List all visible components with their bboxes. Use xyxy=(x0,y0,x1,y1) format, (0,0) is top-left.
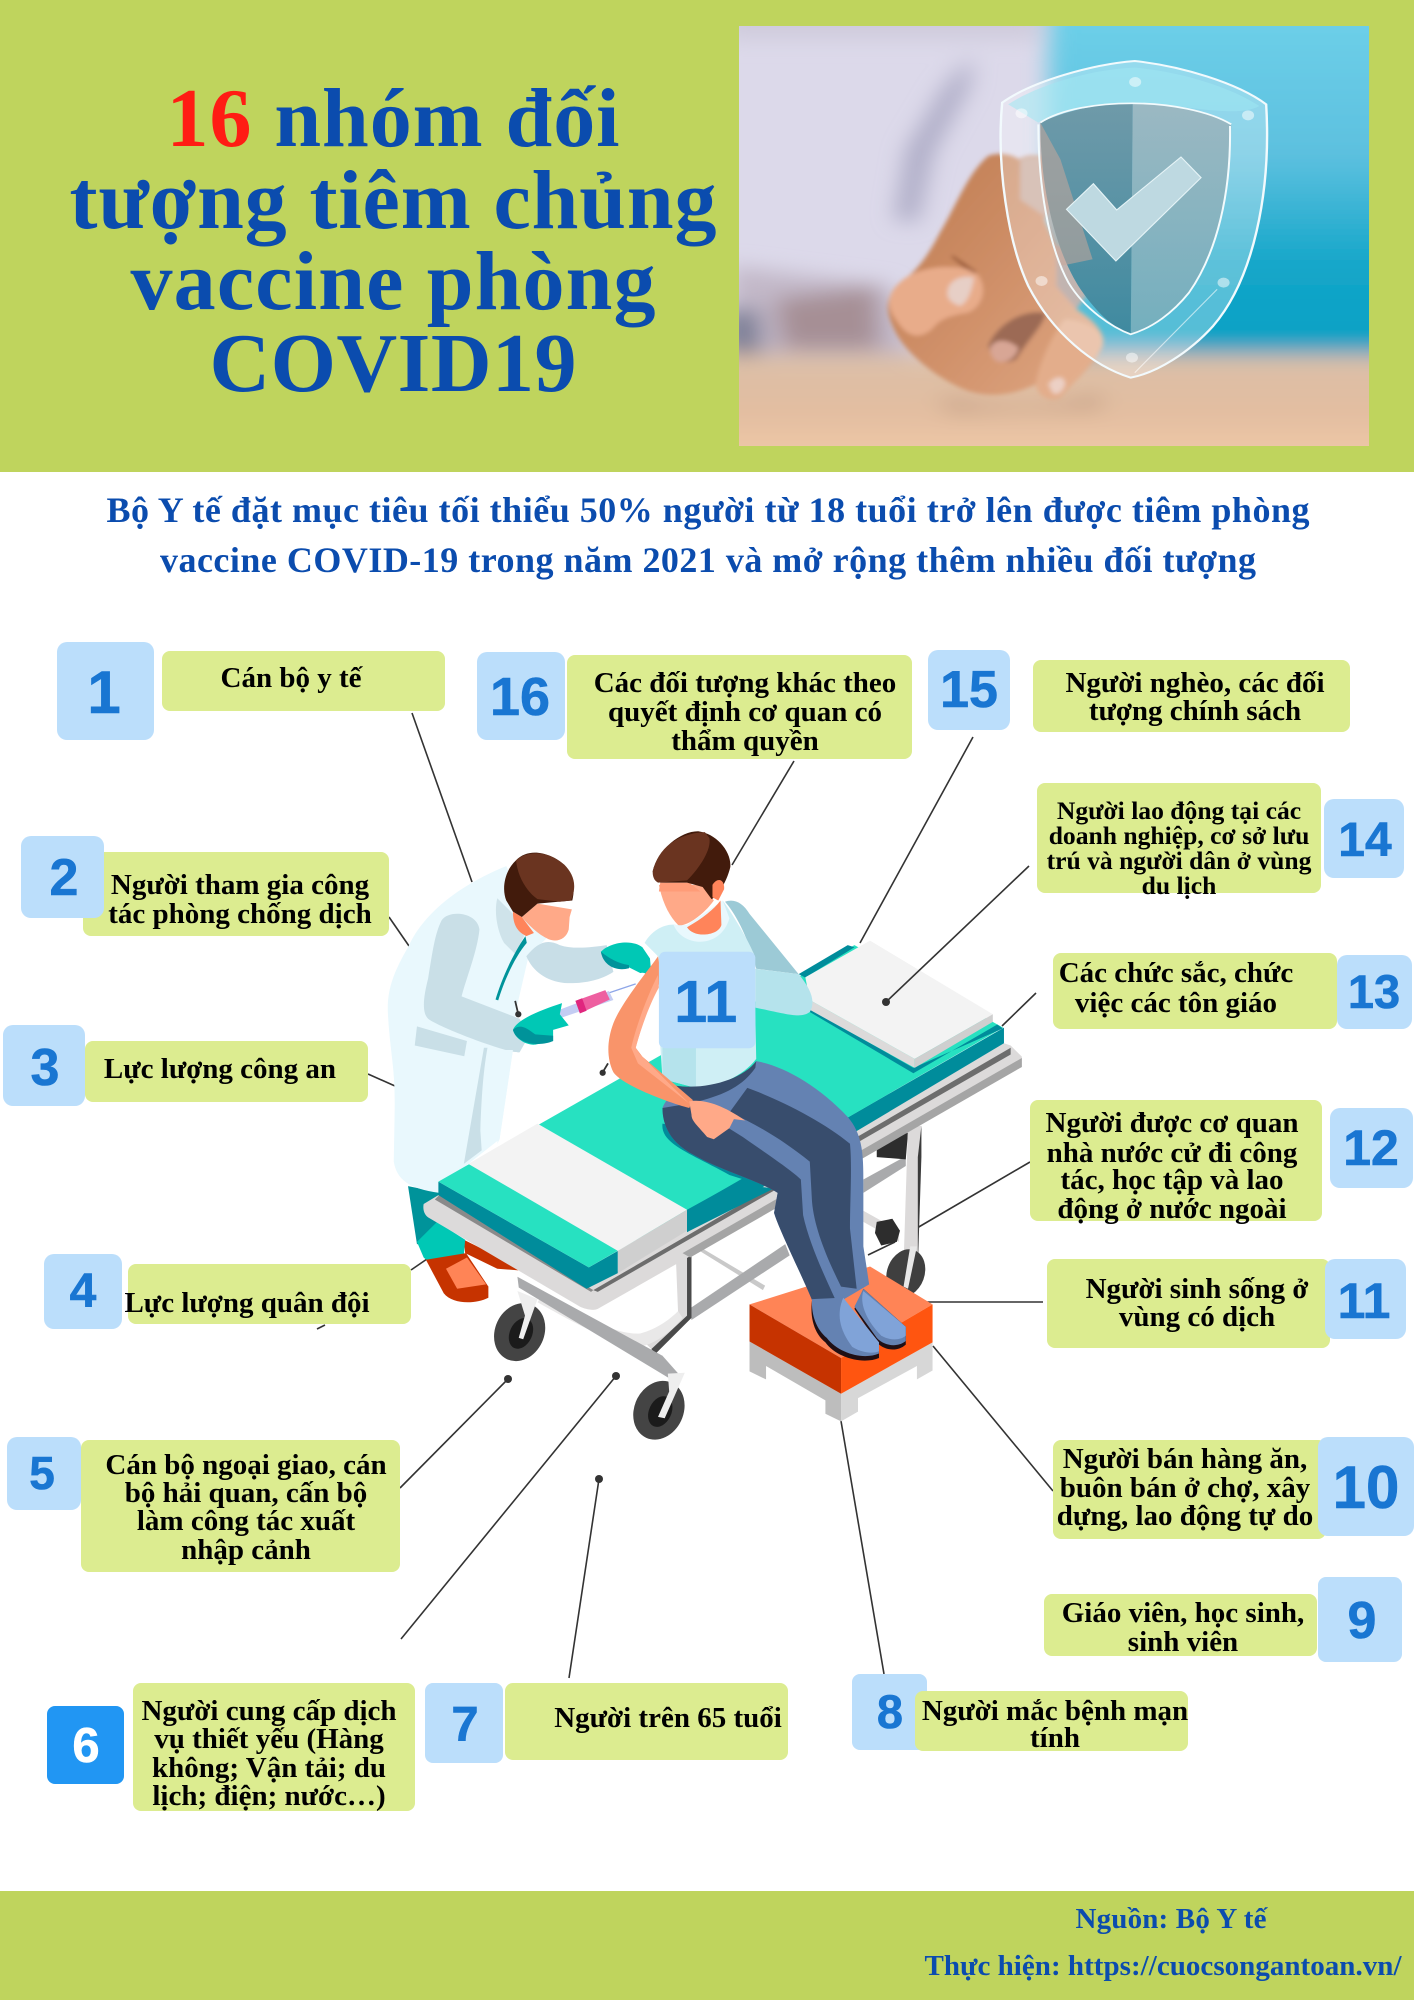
wheels xyxy=(485,1291,694,1448)
item 16 label: quyết định cơ quan có xyxy=(608,696,882,728)
item 3 label xyxy=(85,1041,368,1102)
item 16 label: Các đối tượng khác theo xyxy=(594,667,896,699)
item 5 badge: 5 xyxy=(29,1447,55,1499)
item 15 label: tượng chính sách xyxy=(1089,695,1301,727)
item 5 label: Cán bộ ngoại giao, cán xyxy=(105,1449,387,1481)
item 6 badge xyxy=(47,1706,124,1784)
title xyxy=(70,72,716,410)
footer text: source and credit: Nguồn: Bộ Y tế xyxy=(1076,1903,1269,1935)
item 13 badge: 13 xyxy=(1348,965,1400,1018)
item 9 badge: 9 xyxy=(1348,1592,1376,1650)
mattress xyxy=(438,941,1004,1289)
item 2 label xyxy=(83,852,389,936)
item 1 badge xyxy=(57,642,154,740)
item 13 label xyxy=(1053,953,1337,1029)
photo: hand touching glass shield with check mark xyxy=(739,26,1369,446)
item 1 badge: 1 xyxy=(87,659,121,726)
item 6 label: vụ thiết yếu (Hàng xyxy=(154,1723,384,1755)
item 12 label xyxy=(1030,1100,1322,1225)
item 12 label: tác, học tập và lao xyxy=(1060,1164,1284,1196)
item 12 label: Người được cơ quan xyxy=(1046,1107,1298,1139)
item 6 label: không; Vận tải; du xyxy=(152,1752,386,1784)
gurney undercarriage xyxy=(517,1126,932,1379)
illustration: doctor vaccinating a patient on a hospital bed xyxy=(388,831,1022,1448)
item 8 badge xyxy=(852,1674,927,1750)
subtitle: vaccine COVID-19 trong năm 2021 và mở rộng thêm nhiều đối tượng xyxy=(160,540,1256,580)
item 5 label: làm công tác xuất xyxy=(137,1505,355,1537)
item 10 label: Người bán hàng ăn, xyxy=(1063,1443,1307,1475)
item 4 label xyxy=(124,1264,411,1324)
item 14 label: du lịch xyxy=(1142,871,1216,900)
gloves xyxy=(513,942,651,1045)
item 3 badge: 3 xyxy=(31,1039,59,1097)
step stool xyxy=(750,1266,933,1421)
item 9 label: sinh viên xyxy=(1128,1626,1238,1658)
item 9 label: Giáo viên, học sinh, xyxy=(1062,1597,1304,1629)
doctor stethoscope dot xyxy=(515,1001,518,1014)
leader line 14 over bed pad xyxy=(886,866,1029,1002)
item 11 badge: 11 xyxy=(1338,1273,1390,1329)
header band xyxy=(0,0,1414,472)
item 15 badge xyxy=(928,650,1010,730)
item 16 badge xyxy=(477,652,565,740)
item 12 badge xyxy=(1330,1108,1413,1188)
item 13 badge xyxy=(1337,955,1412,1029)
item 11 label: vùng có dịch xyxy=(1119,1301,1275,1333)
item 12 label: nhà nước cử đi công xyxy=(1047,1137,1298,1169)
leader line end dots xyxy=(504,998,890,1483)
item 5 label: bộ hải quan, cấn bộ xyxy=(125,1477,367,1509)
badge: 11 on patient: 11 xyxy=(674,968,737,1035)
item 8 label xyxy=(915,1691,1188,1754)
syringe xyxy=(550,984,636,1021)
item 4 badge xyxy=(44,1254,122,1329)
item 9 label xyxy=(1044,1594,1317,1658)
item 2 label: tác phòng chống dịch xyxy=(108,898,372,930)
glass shield xyxy=(1001,61,1267,378)
item 15 badge: 15 xyxy=(940,661,998,719)
item 6 label xyxy=(133,1683,415,1812)
item 14 label: trú và người dân ở vùng xyxy=(1047,846,1312,875)
item 2 label: Người tham gia công xyxy=(111,869,370,901)
item 5 label xyxy=(81,1440,400,1572)
item 14 label xyxy=(1037,783,1321,900)
item 3 badge xyxy=(3,1025,85,1106)
hand xyxy=(888,154,1103,399)
item 2 badge: 2 xyxy=(50,849,78,907)
item 3 label: Lực lượng công an xyxy=(104,1053,336,1085)
item 7 badge xyxy=(425,1683,503,1763)
item 10 badge: 10 xyxy=(1333,1454,1399,1521)
item 14 badge xyxy=(1324,799,1404,878)
footer text: source and credit: Thực hiện: https://cuocsongantoan.vn/ xyxy=(924,1950,1402,1982)
item 8 label: tính xyxy=(1030,1722,1080,1754)
item 7 label xyxy=(505,1683,788,1760)
footer band xyxy=(0,1891,1414,2000)
badge: 11 on patient xyxy=(659,952,755,1048)
item 10 label: dựng, lao động tự do xyxy=(1057,1500,1313,1532)
subtitle: Bộ Y tế đặt mục tiêu tối thiểu 50% người từ 18 tuổi trở lên được tiêm phòng xyxy=(106,490,1310,530)
item 12 badge: 12 xyxy=(1343,1120,1399,1176)
title: tượng tiêm chủng xyxy=(70,154,716,247)
footer text: source and credit xyxy=(924,1903,1402,1982)
title: COVID19 xyxy=(210,317,576,410)
item 4 label: Lực lượng quân đội xyxy=(124,1287,370,1319)
item 14 badge: 14 xyxy=(1338,814,1392,867)
item 15 label: Người nghèo, các đối xyxy=(1065,667,1325,699)
item 1 label xyxy=(162,651,445,711)
leader lines xyxy=(317,713,1053,1678)
item 5 badge xyxy=(7,1437,81,1510)
dots on illustration xyxy=(603,1063,608,1072)
item 6 label: lịch; điện; nước…) xyxy=(152,1780,386,1812)
item 10 label: buôn bán ở chợ, xây xyxy=(1060,1472,1311,1504)
item 13 label: Các chức sắc, chức xyxy=(1059,957,1293,989)
patient xyxy=(608,831,906,1361)
item 10 label xyxy=(1053,1440,1326,1539)
item 7 badge: 7 xyxy=(451,1698,479,1752)
doctor coat xyxy=(388,866,613,1193)
item 6 badge: 6 xyxy=(72,1719,100,1773)
title: vaccine phòng xyxy=(130,235,656,328)
item 9 badge xyxy=(1318,1577,1402,1662)
item 15 label xyxy=(1033,660,1350,732)
item 16 label: thẩm quyền xyxy=(671,725,819,757)
item 11 badge xyxy=(1325,1259,1406,1339)
item 13 label: việc các tôn giáo xyxy=(1075,987,1277,1019)
title: 16 nhóm đối xyxy=(166,72,620,165)
item 6 label: Người cung cấp dịch xyxy=(141,1695,397,1727)
item 7 label: Người trên 65 tuổi xyxy=(554,1702,782,1734)
bed frame plate xyxy=(423,1043,1022,1310)
item 5 label: nhập cảnh xyxy=(181,1534,311,1566)
item 10 badge xyxy=(1318,1437,1414,1536)
item 8 badge: 8 xyxy=(877,1685,903,1738)
item 16 badge: 16 xyxy=(490,667,550,727)
item 1 label: Cán bộ y tế xyxy=(221,662,364,694)
item 11 label: Người sinh sống ở xyxy=(1086,1273,1308,1305)
item 11 label xyxy=(1047,1259,1330,1348)
item 16 label xyxy=(567,655,912,759)
item 14 label: Người lao động tại các xyxy=(1057,796,1301,825)
doctor head xyxy=(504,853,574,941)
item 4 badge: 4 xyxy=(70,1265,97,1318)
doctor legs and shoes xyxy=(408,1186,526,1302)
item 8 label: Người mắc bệnh mạn xyxy=(922,1695,1188,1727)
item 12 label: động ở nước ngoài xyxy=(1057,1193,1287,1225)
item 2 badge xyxy=(21,836,104,918)
subtitle xyxy=(106,490,1310,580)
item 14 label: doanh nghiệp, cơ sở lưu xyxy=(1049,821,1309,850)
